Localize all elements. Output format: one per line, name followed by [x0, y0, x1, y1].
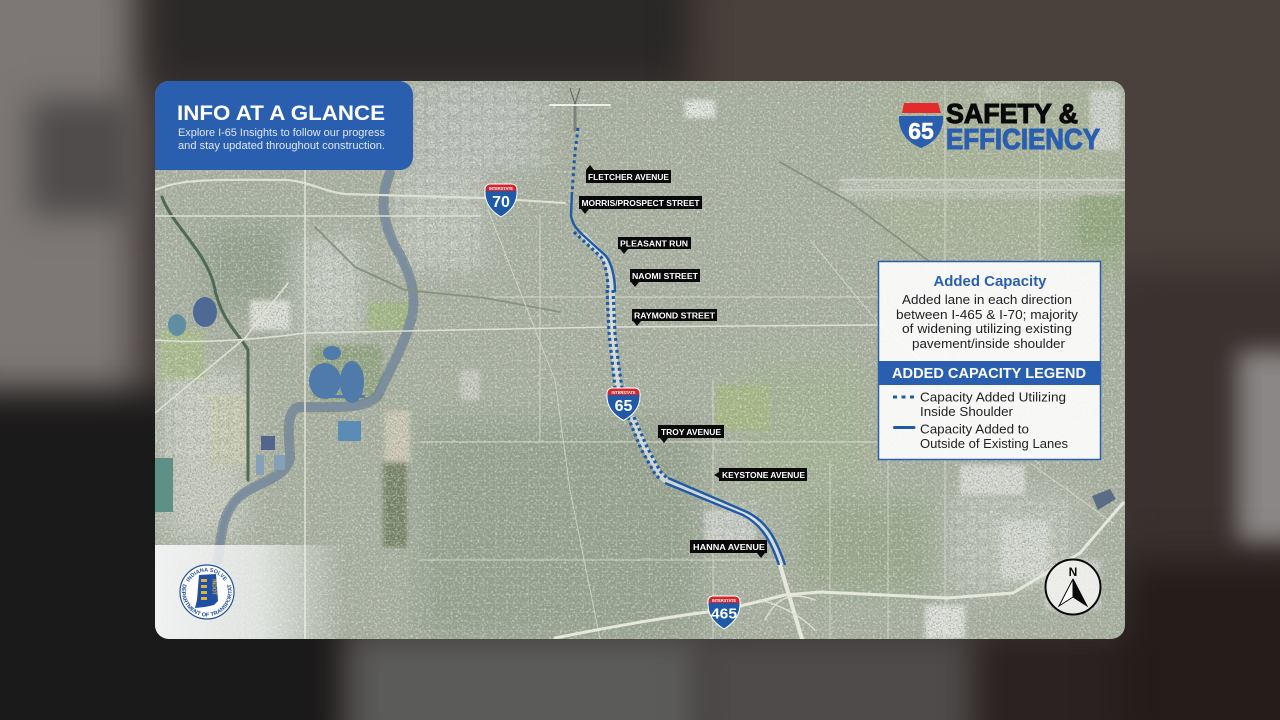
label: Keystone Avenue: KEYSTONE AVENUE [722, 470, 805, 480]
legend item: outside lanes [894, 422, 1068, 451]
label: Pleasant Run [618, 237, 691, 254]
label: Troy Avenue: TROY AVENUE [661, 427, 721, 437]
label: Naomi Street [630, 269, 700, 287]
roads [155, 85, 1125, 639]
legend item: outside lanes: Capacity Added to [920, 422, 1029, 436]
label: Keystone Avenue [714, 468, 807, 481]
map card [155, 81, 1125, 639]
text: capacity description: Added lane in each direction [902, 293, 1072, 307]
route: single dotted north [572, 128, 578, 193]
route: solid outside lane north [571, 192, 615, 292]
label: Naomi Street: NAOMI STREET [632, 271, 699, 281]
label: Fletcher Avenue: FLETCHER AVENUE [588, 172, 669, 182]
icon: I-65 shield: INTERSTATE [612, 390, 636, 395]
legend heading band [878, 361, 1101, 385]
heading: info at a glance: INFO AT A GLANCE [177, 102, 385, 125]
icon: I-65 shield [607, 388, 640, 420]
street labels [579, 165, 807, 558]
icon: I-70 shield [485, 184, 517, 217]
icon: I-465 shield: 465 [711, 606, 737, 622]
icon: I-70 shield: 70 [492, 194, 510, 211]
panel: added capacity [878, 262, 1101, 460]
text: explore insights: Explore I-65 Insights to follow our progress [178, 127, 385, 139]
icon: INDOT seal: DEPARTMENT OF TRANSPORTATION [182, 584, 232, 616]
logo: Safety and Efficiency: EFFICIENCY [946, 124, 1100, 156]
lakes [155, 297, 1116, 512]
logo: Safety and Efficiency [899, 98, 1100, 156]
icon: north arrow: N [1069, 565, 1077, 579]
legend item: inside shoulder: Capacity Added Utilizing [920, 390, 1066, 404]
icon: I-465 shield: INTERSTATE [712, 598, 736, 603]
neighbourhood street grid [155, 81, 1125, 639]
panel: info at a glance [155, 81, 413, 170]
label: Raymond Street: RAYMOND STREET [634, 310, 716, 320]
legend item: inside shoulder [893, 390, 1066, 419]
icon: logo shield [899, 103, 943, 148]
label: Hanna Avenue [690, 540, 767, 558]
route: dotted inside lane north [574, 232, 608, 292]
route: double dotted centre [607, 290, 622, 388]
label: Morris/Prospect Street: MORRIS/PROSPECT STREET [582, 198, 700, 208]
legend item: inside shoulder: Inside Shoulder [920, 405, 1013, 419]
industrial buildings [165, 85, 1070, 590]
icon: I-70 shield: INTERSTATE [489, 186, 513, 191]
legend item: outside lanes: Outside of Existing Lanes [920, 437, 1068, 451]
route: double dotted south [628, 417, 667, 480]
label: Fletcher Avenue [586, 165, 671, 183]
river and canal [162, 173, 414, 560]
label: Pleasant Run: PLEASANT RUN [620, 238, 688, 248]
icon: logo shield: 65 [908, 118, 934, 144]
heading: added capacity: Added Capacity [934, 274, 1046, 290]
text: explore insights: and stay updated throughout construction. [178, 140, 385, 152]
aerial map [155, 81, 1130, 640]
logo: Safety and Efficiency: SAFETY & [946, 98, 1078, 129]
land cover patches [165, 85, 1130, 640]
legend heading band: ADDED CAPACITY LEGEND [892, 366, 1086, 382]
text: capacity description: of widening utilizing existing [902, 322, 1072, 336]
icon: I-65 shield: 65 [615, 398, 632, 415]
icon: I-465 shield [708, 596, 740, 629]
icon: INDOT seal: INDIANA SOLVE [186, 568, 228, 582]
texture [155, 81, 1125, 639]
text: capacity description [896, 293, 1079, 351]
text: capacity description: pavement/inside shoulder [912, 337, 1065, 351]
label: Hanna Avenue: HANNA AVENUE [693, 542, 765, 552]
project route [571, 128, 785, 565]
text: capacity description: between I-465 & I-70; majority [896, 308, 1079, 322]
icon: north arrow [1046, 560, 1100, 614]
label: Morris/Prospect Street [579, 196, 702, 214]
icon: INDOT seal [179, 564, 235, 620]
label: Troy Avenue [658, 425, 724, 443]
bottom-left white fade for seal [155, 545, 345, 639]
route: double solid south [665, 478, 785, 565]
icon: INDOT seal: INDOT [210, 579, 216, 595]
text: explore insights [178, 127, 385, 152]
route: white underlay on double sections [582, 234, 782, 565]
label: Raymond Street [632, 309, 717, 326]
